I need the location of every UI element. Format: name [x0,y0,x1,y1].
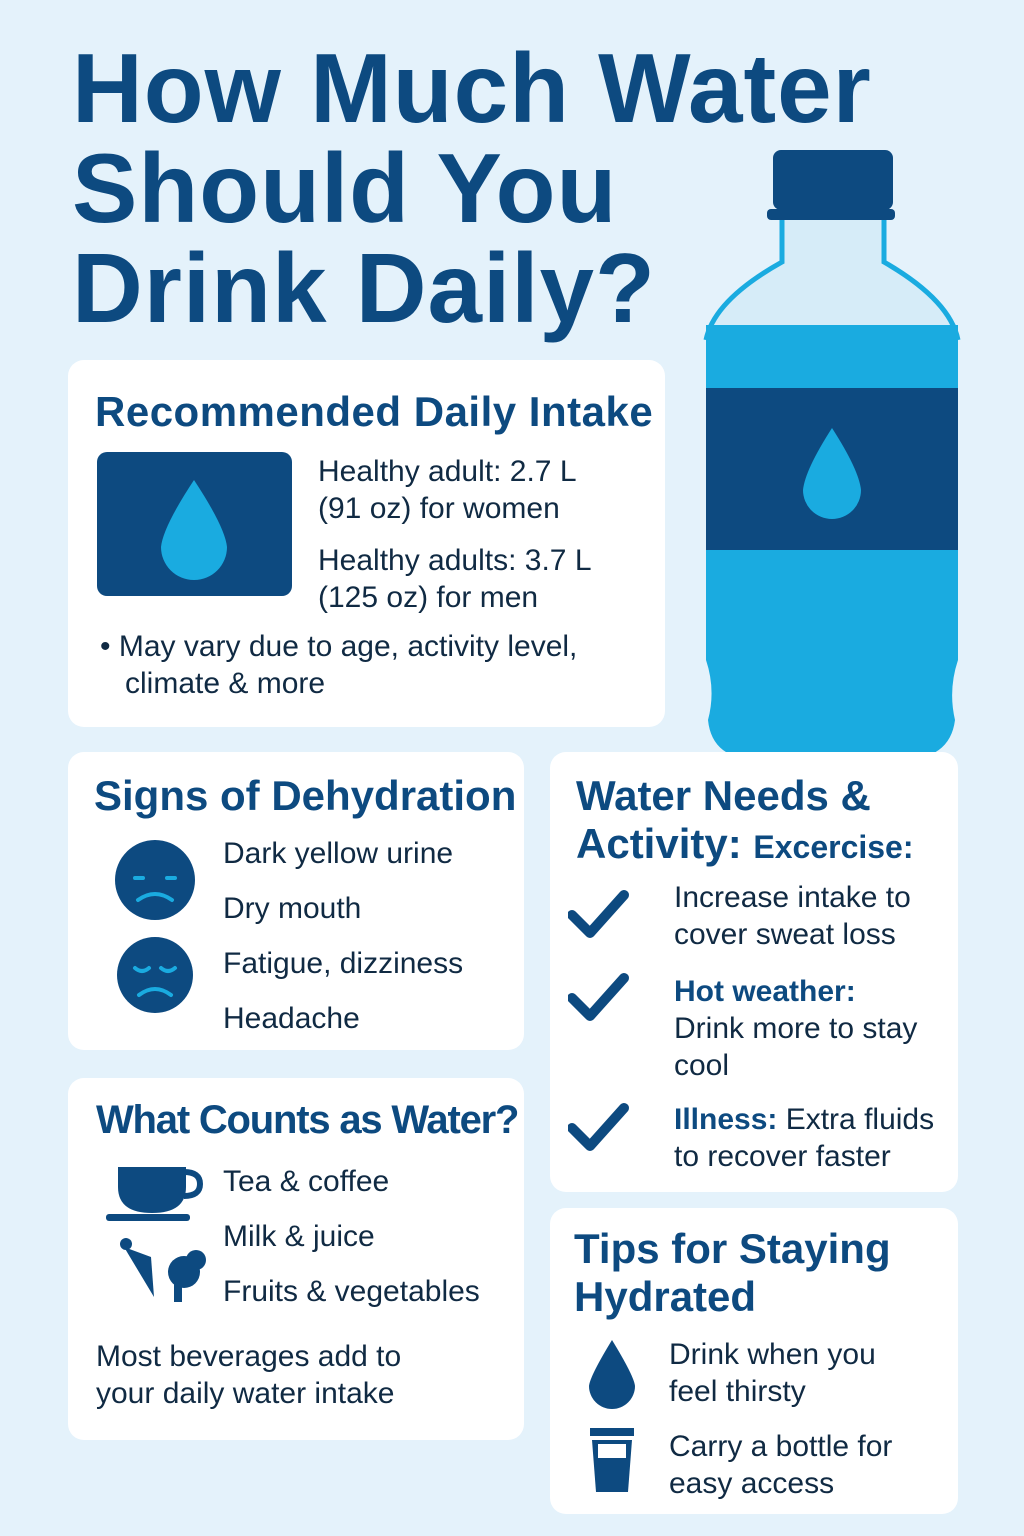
panel: tips [550,1208,958,1514]
heading: Tips for Staying [574,1225,891,1272]
text: intake amounts [318,455,577,525]
text: bullet: • May vary due to age, activity level, [100,630,577,663]
text: list: Tea & coffee [223,1165,389,1198]
heading: What Counts as Water? [96,1098,518,1142]
heading: Water Needs & [576,772,871,819]
panel: what counts as water [68,1078,524,1440]
panel: recommended daily intake: Healthy adults: 3.7 L [318,544,592,577]
text: items [674,881,911,951]
text: footer: your daily water intake [96,1377,394,1410]
panel: water needs & activity: Drink more to stay [674,1012,917,1045]
icon: drop box [97,452,292,596]
text: items: Increase intake to [674,881,911,914]
text: tips: Drink when you [669,1338,876,1371]
heading: Signs of Dehydration [94,772,516,819]
panel: water needs & activity: Illness: Extra fluids [674,1103,934,1136]
text: bullet [100,630,577,700]
title [72,33,872,343]
panel: water needs & activity: cool [674,1049,729,1082]
text: signs list: Fatigue, dizziness [223,947,463,980]
panel: signs of dehydration [68,752,524,1050]
text: items: cover sweat loss [674,918,896,951]
text: signs list: Dark yellow urine [223,837,453,870]
text: intake amounts: Healthy adult: 2.7 L [318,455,577,488]
text: list: Milk & juice [223,1220,375,1253]
panel: tips: Carry a bottle for [669,1430,892,1463]
title: Drink Daily? [72,233,656,343]
heading: Hydrated [574,1273,756,1320]
panel: water needs & activity [550,752,958,1192]
text: footer: Most beverages add to [96,1340,401,1373]
text: footer [96,1340,401,1410]
text: list [223,1165,480,1308]
heading: Activity: Excercise: [576,820,914,867]
text: intake amounts: (91 oz) for women [318,492,560,525]
text: list: Fruits & vegetables [223,1275,480,1308]
title: How Much Water [72,33,872,143]
icon: water bottle [704,150,960,752]
heading [576,772,914,867]
text: tips [669,1338,876,1408]
heading: Recommended Daily Intake [95,388,653,435]
icon: cup and produce [106,1167,206,1302]
text: signs list: Dry mouth [223,892,361,925]
icon: checkmarks [568,890,629,1151]
text: signs list [223,837,463,1035]
icon: drop and glass [589,1340,635,1492]
panel: recommended daily intake: (125 oz) for men [318,581,538,614]
text: bullet: climate & more [125,667,325,700]
text: signs list: Headache [223,1002,360,1035]
panel: recommended daily intake [68,360,665,727]
panel: tips: easy access [669,1467,834,1500]
panel: water needs & activity: to recover faster [674,1140,891,1173]
heading [574,1225,891,1320]
title: Should You [72,133,617,243]
icon: sad faces [115,840,195,1013]
text: tips: feel thirsty [669,1375,806,1408]
panel: water needs & activity: Hot weather: [674,975,856,1008]
